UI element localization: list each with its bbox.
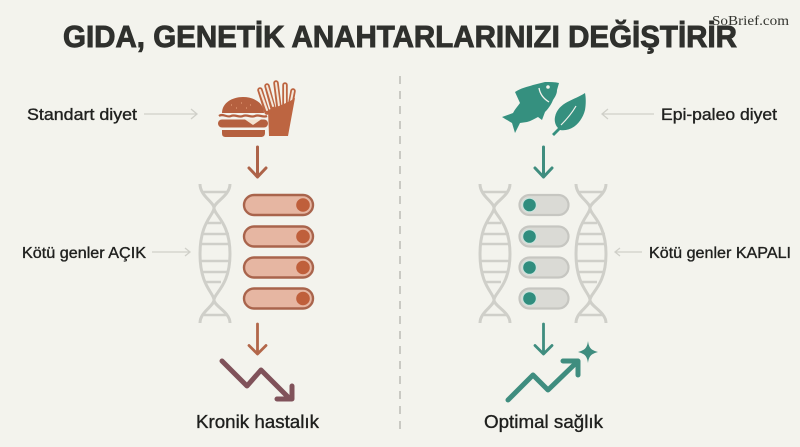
switches OFF [520,195,568,308]
arrow: food to switches, left [249,147,266,177]
icon: DNA helix, right outer [576,184,606,323]
label: Optimal sağlık: Optimal sağlık [484,411,604,432]
icon: burger and fries [218,83,295,137]
switches ON [244,195,313,308]
arrow: genes label to DNA, right [615,248,642,256]
icon: DNA helix, left [200,184,230,323]
label: Kronik hastalık: Kronik hastalık [196,411,320,432]
arrow: food to switches, right [535,147,552,177]
center divider [399,76,401,430]
icon: DNA helix, right inner [480,184,510,323]
icon: declining trend arrow [222,361,292,399]
arrow: epi-paleo label to food [602,109,654,119]
label: Epi-paleo diyet: Epi-paleo diyet [661,106,777,124]
title: GIDA, GENETİK ANAHTARLARINIZI DEĞİŞTİRİR [63,19,737,54]
arrow: switches to outcome, right [535,324,552,354]
label: Kötü genler KAPALI: Kötü genler KAPALI [649,245,791,262]
label: Standart diyet: Standart diyet [27,106,137,124]
icon: rising trend arrow with sparkle [508,341,598,400]
arrow: genes label to DNA, left [152,248,190,256]
watermark: SoBrief.com [712,14,789,29]
icon: fish and leaf [502,82,586,136]
arrow: standard diet label to food [144,109,197,119]
arrow: switches to outcome, left [249,324,266,354]
label: Kötü genler AÇIK: Kötü genler AÇIK [22,245,147,262]
